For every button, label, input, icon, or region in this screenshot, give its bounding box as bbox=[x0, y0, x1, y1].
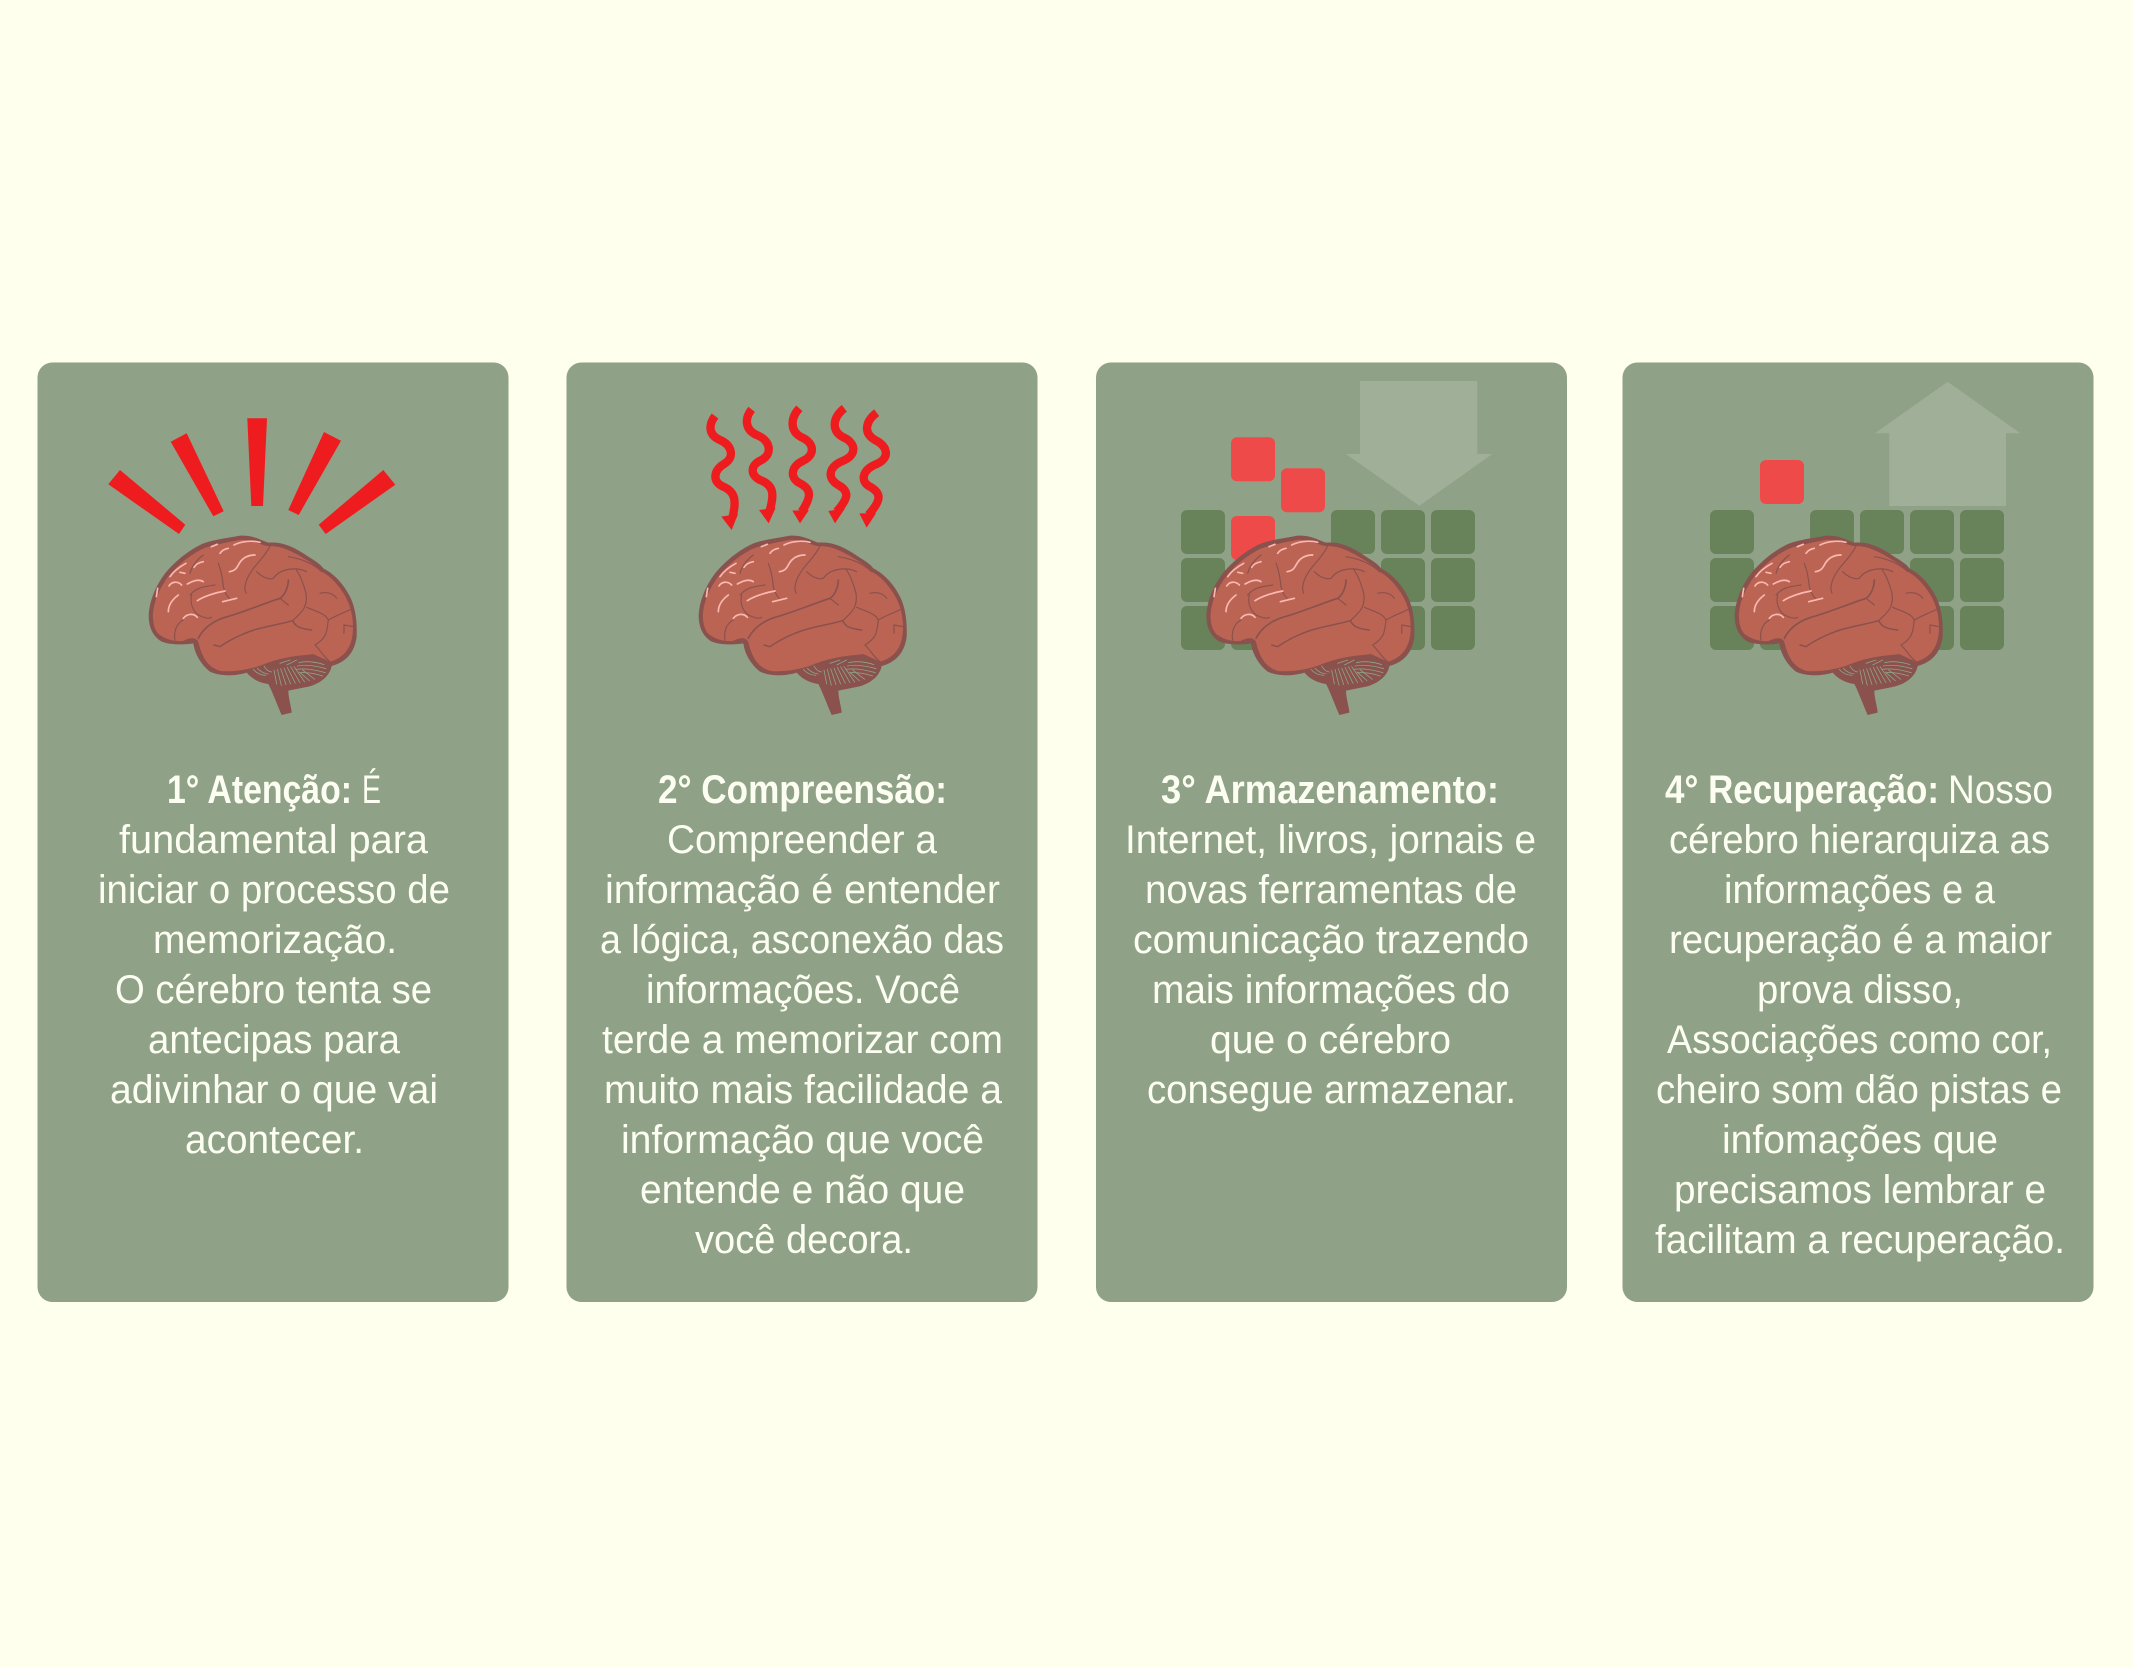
text: compreensão: muito mais facilidade a bbox=[604, 1068, 1003, 1112]
text: armazenamento bbox=[1125, 768, 1536, 1112]
icon: red squares bbox=[1231, 437, 1325, 560]
icon: brain bbox=[1206, 536, 1414, 715]
text: armazenamento: Internet, livros, jornais e bbox=[1125, 818, 1536, 862]
text: atenção: É bbox=[362, 767, 381, 812]
panel: 1 Atenção bbox=[38, 362, 508, 1302]
text: recuperação: Nosso bbox=[1948, 768, 2053, 812]
text: recuperação bbox=[1655, 768, 2065, 1262]
text: recuperação: recuperação é a maior bbox=[1669, 918, 2052, 962]
icon: down arrow bbox=[1346, 381, 1492, 506]
text: atenção: acontecer. bbox=[185, 1118, 364, 1162]
icon: dark storage grid bbox=[1181, 510, 1475, 650]
text: recuperação: cheiro som dão pistas e bbox=[1656, 1068, 2062, 1112]
panel: 4 Recuperação bbox=[1622, 362, 2094, 1302]
text: recuperação: precisamos lembrar e bbox=[1674, 1168, 2046, 1212]
text: compreensão: terde a memorizar com bbox=[602, 1018, 1003, 1062]
icon: brain bbox=[699, 536, 907, 715]
icon: wavy red arrows bbox=[710, 408, 886, 530]
icon: brain bbox=[1735, 536, 1943, 715]
text: atenção: O cérebro tenta se bbox=[115, 968, 432, 1012]
text: compreensão: entende e não que bbox=[640, 1168, 965, 1212]
icon: dark storage grid bbox=[1710, 510, 2004, 650]
text: compreensão: você decora. bbox=[695, 1218, 913, 1262]
text: armazenamento: consegue armazenar. bbox=[1147, 1068, 1516, 1112]
panel: 2 Compreensão bbox=[566, 362, 1038, 1302]
text: recuperação: cérebro hierarquiza as bbox=[1669, 818, 2050, 862]
text: recuperação: 4° Recuperação: bbox=[1665, 768, 1939, 812]
text: armazenamento: mais informações do bbox=[1152, 968, 1510, 1012]
text: atenção: adivinhar o que vai bbox=[110, 1068, 438, 1112]
text: atenção bbox=[98, 767, 450, 1162]
icon: up arrow bbox=[1875, 382, 2020, 506]
text: recuperação: infomações que bbox=[1722, 1118, 1998, 1162]
text: atenção: memorização. bbox=[153, 918, 397, 962]
icon: red square bbox=[1760, 460, 1804, 504]
text: recuperação: Associações como cor, bbox=[1667, 1018, 2052, 1062]
text: recuperação: informações e a bbox=[1724, 868, 1996, 912]
panel: 3 Armazenamento bbox=[1096, 362, 1567, 1302]
icon: brain bbox=[149, 536, 357, 715]
text: compreensão: 2° Compreensão: bbox=[658, 768, 947, 812]
text: armazenamento: que o cérebro bbox=[1210, 1018, 1451, 1062]
text: atenção: fundamental para bbox=[119, 818, 429, 862]
text: compreensão: informação que você bbox=[621, 1118, 984, 1162]
text: compreensão: informação é entender bbox=[605, 868, 1000, 912]
icon: red attention rays bbox=[108, 418, 395, 534]
text: armazenamento: 3° Armazenamento: bbox=[1161, 768, 1499, 812]
text: compreensão: Compreender a bbox=[667, 818, 938, 862]
text: compreensão: a lógica, asconexão das bbox=[600, 918, 1004, 962]
text: recuperação: facilitam a recuperação. bbox=[1655, 1218, 2065, 1262]
text: atenção: iniciar o processo de bbox=[98, 868, 450, 912]
text: recuperação: prova disso, bbox=[1757, 968, 1963, 1012]
text: armazenamento: novas ferramentas de bbox=[1145, 868, 1517, 912]
text: armazenamento: comunicação trazendo bbox=[1133, 918, 1529, 962]
text: compreensão: informações. Você bbox=[646, 968, 960, 1012]
text: atenção: 1° Atenção: bbox=[167, 768, 352, 812]
text: atenção: antecipas para bbox=[148, 1018, 401, 1062]
text: compreensão bbox=[600, 768, 1004, 1262]
